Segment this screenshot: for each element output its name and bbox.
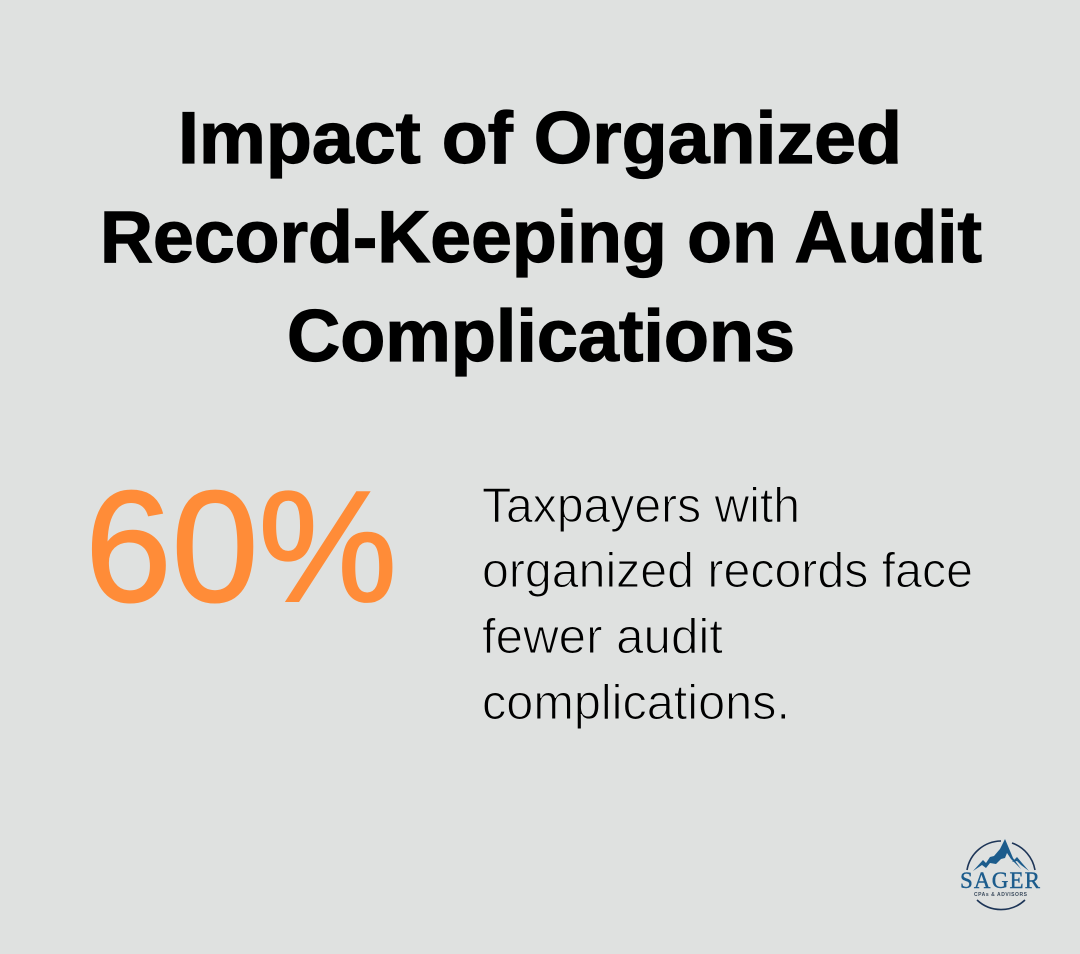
logo tagline: CPAs & ADVISORS xyxy=(974,892,1028,898)
logo: Sager CPAs & Advisors xyxy=(960,839,1041,910)
description text: Taxpayers with xyxy=(482,479,800,533)
logo mountains xyxy=(973,839,1021,871)
description text: fewer audit xyxy=(482,610,723,664)
statistic: 60%: 60% xyxy=(85,459,397,635)
title: Impact of Organized xyxy=(178,98,902,179)
logo wordmark: SAGER xyxy=(960,868,1041,893)
logo ring xyxy=(967,841,1035,910)
title: Complications xyxy=(287,296,795,377)
description text: complications. xyxy=(482,676,790,730)
title: Record-Keeping on Audit xyxy=(100,197,982,278)
title xyxy=(100,98,982,377)
description text: organized records face xyxy=(482,544,973,598)
description text xyxy=(482,479,973,730)
